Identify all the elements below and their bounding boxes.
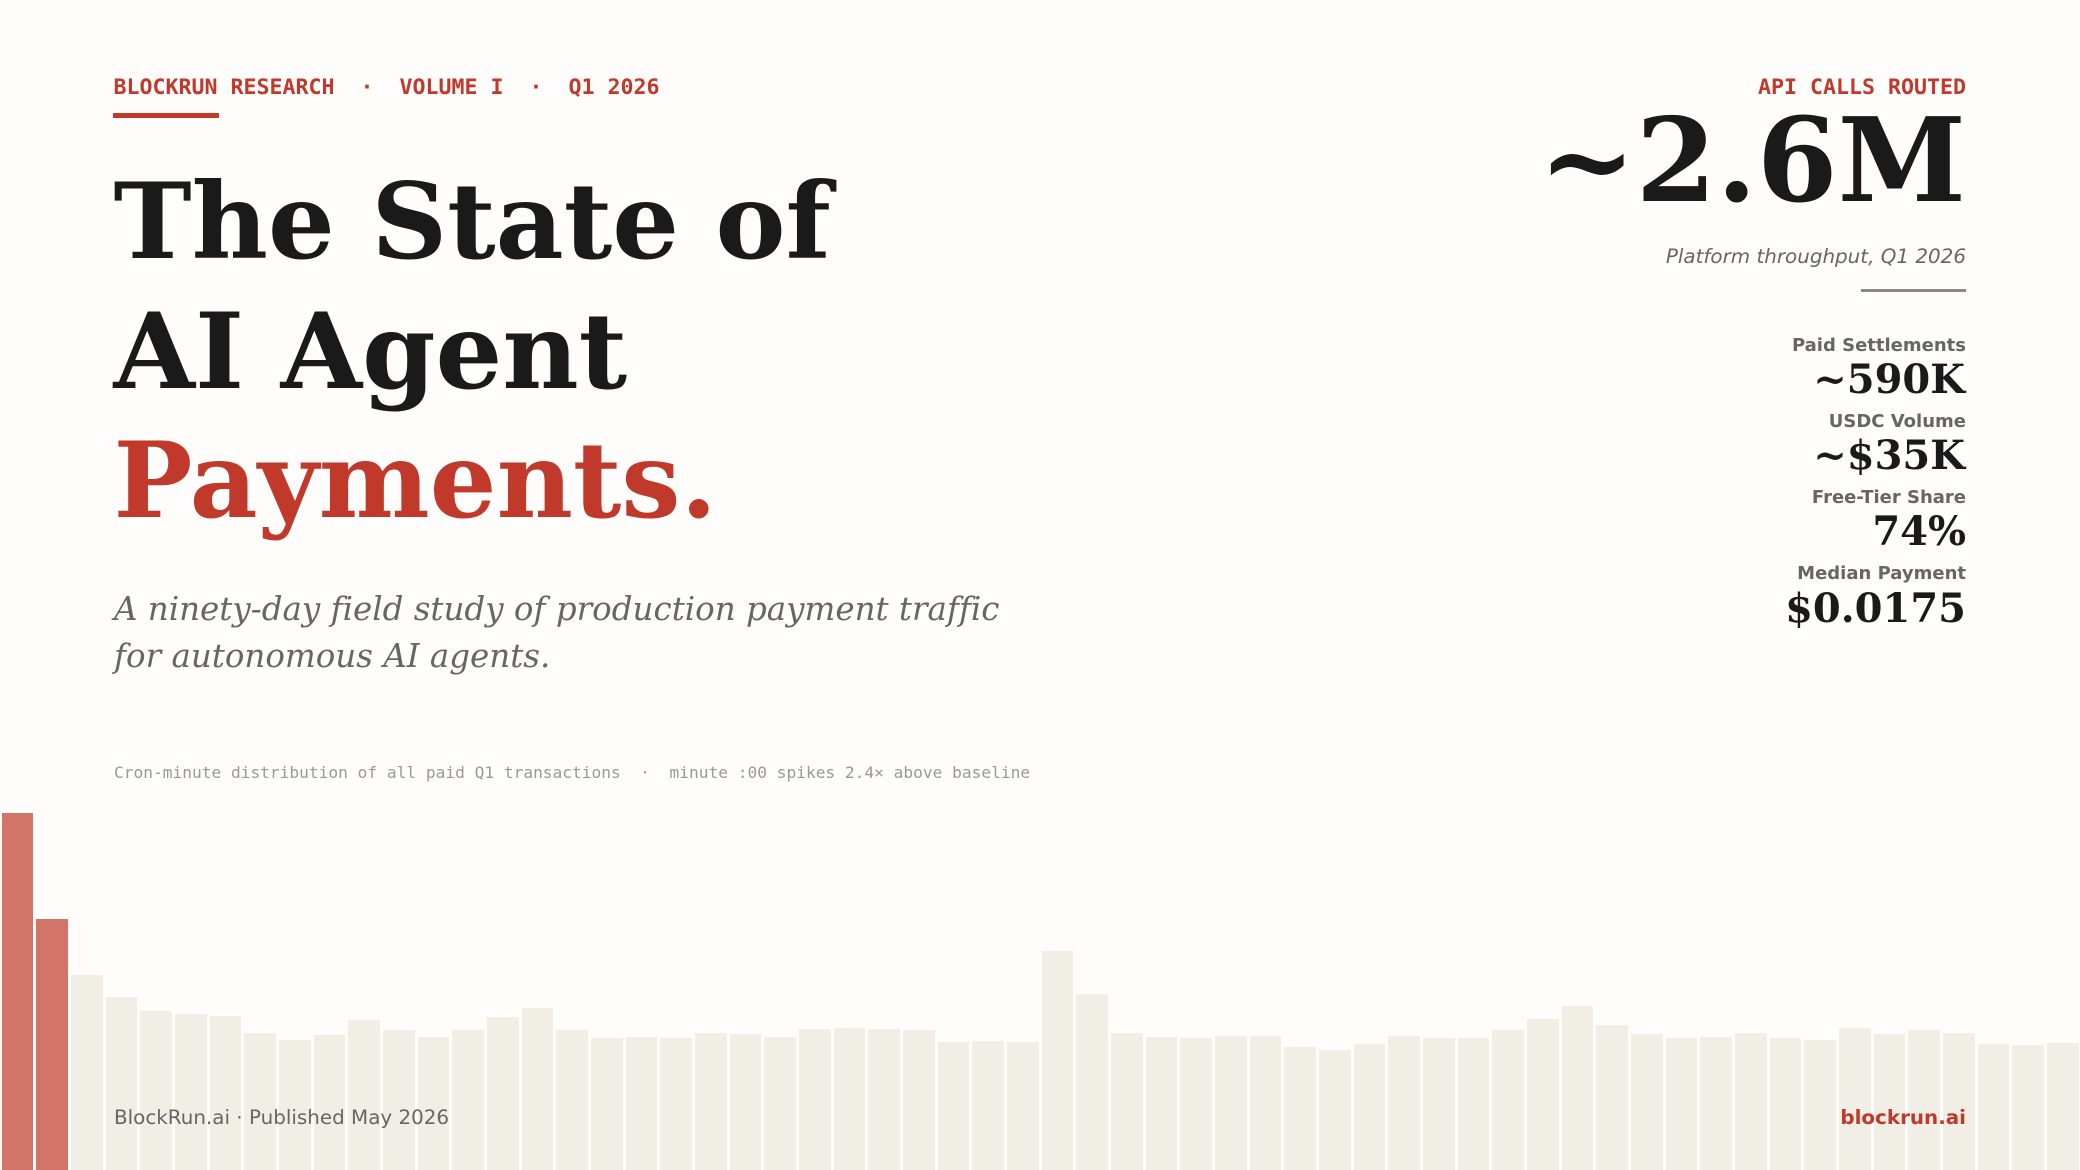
value: $0.0175 xyxy=(1785,585,1966,632)
hero divider xyxy=(1861,289,1966,292)
stat: median payment xyxy=(1785,563,1966,632)
value: ~$35K xyxy=(1813,432,1965,479)
footer link: blockrun.ai xyxy=(1840,1106,1966,1129)
label: Paid Settlements xyxy=(1792,335,1966,356)
subtitle: A ninety-day field study of production payment traffic for autonomous AI agents. xyxy=(114,590,1000,675)
value: 74% xyxy=(1872,508,1966,555)
stat: usdc volume xyxy=(1813,411,1966,479)
hero stat label: API CALLS ROUTED xyxy=(1758,75,1966,100)
title: The State of AI Agent Payments. xyxy=(114,159,831,542)
label: USDC Volume xyxy=(1829,411,1966,432)
stat: paid settlements xyxy=(1792,335,1966,403)
stat: free-tier share xyxy=(1812,487,1966,555)
footer credit: BlockRun.ai · Published May 2026 xyxy=(114,1106,449,1129)
hero stat value: ~2.6M xyxy=(1539,93,1966,229)
eyebrow: BLOCKRUN RESEARCH · VOLUME I · Q1 2026 xyxy=(114,75,660,100)
value: ~590K xyxy=(1813,356,1965,403)
hero stat caption: Platform throughput, Q1 2026 xyxy=(1666,245,1966,268)
eyebrow accent rule xyxy=(113,113,219,118)
label: Median Payment xyxy=(1797,563,1966,584)
label: Free-Tier Share xyxy=(1812,487,1966,508)
chart caption: Cron-minute distribution of all paid Q1 transactions · minute :00 spikes 2.4× above baseline xyxy=(114,763,1030,782)
